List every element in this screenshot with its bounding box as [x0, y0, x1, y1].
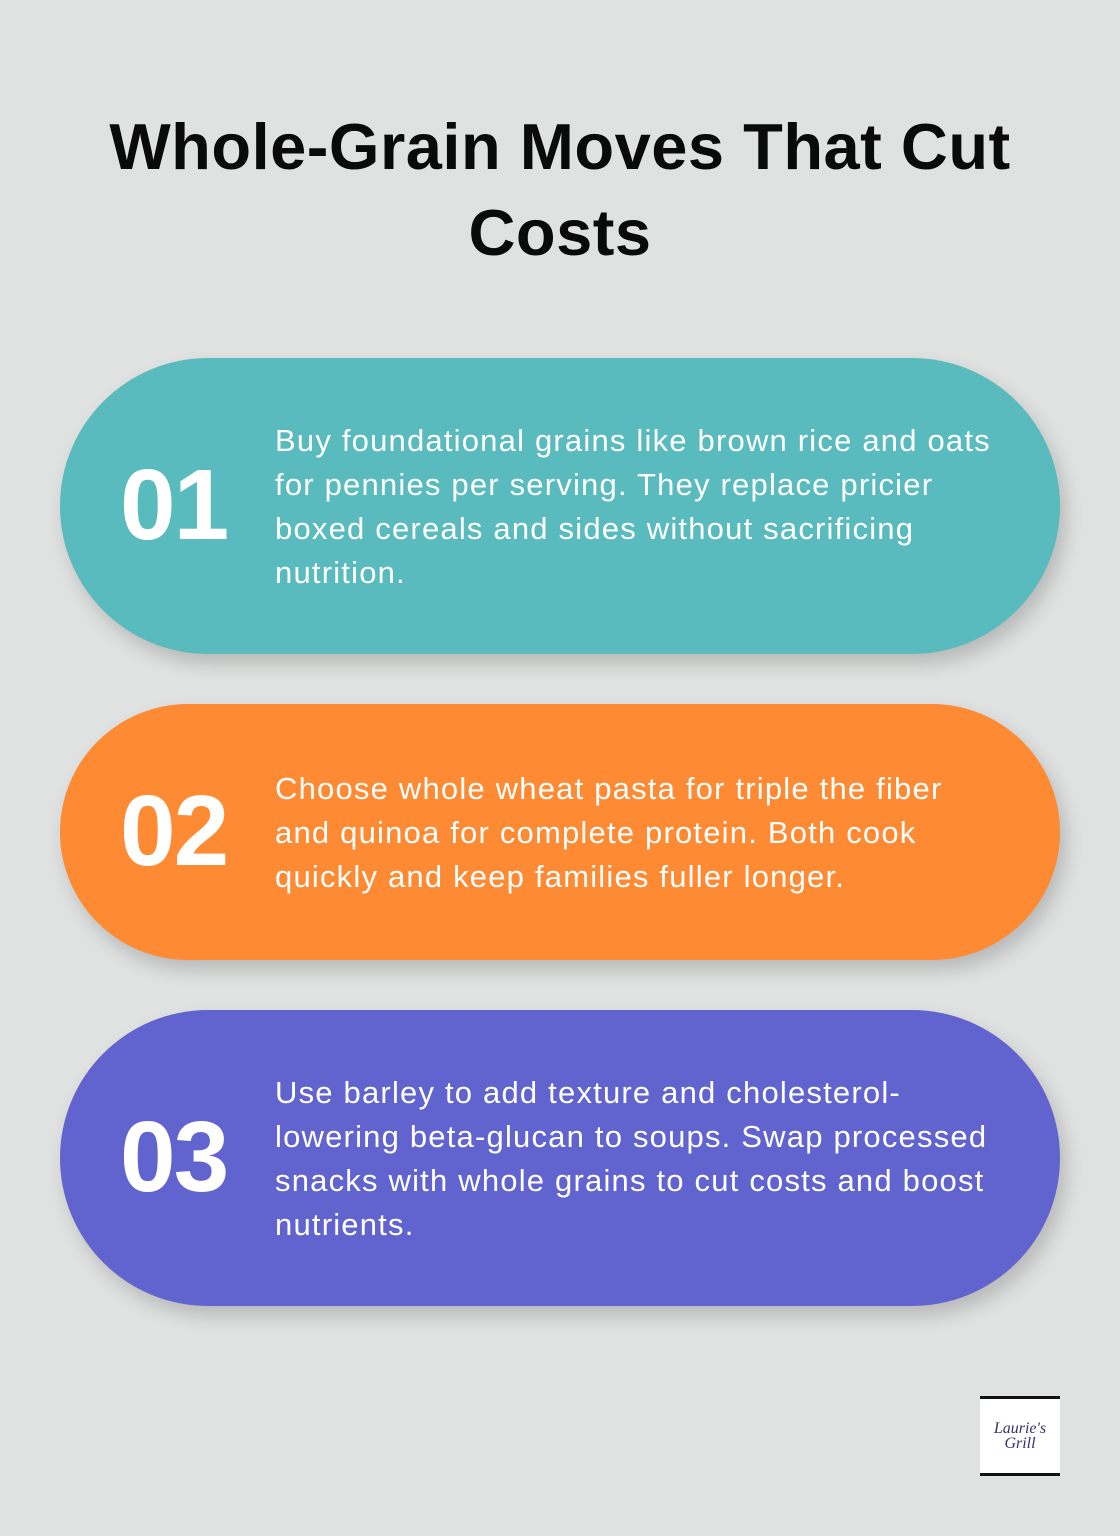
text step 1: nutrition.	[275, 555, 406, 590]
text step 3	[275, 1075, 987, 1242]
panel: step 3	[60, 1010, 1060, 1306]
text step 3: lowering beta-glucan to soups. Swap processed	[275, 1119, 987, 1154]
panel: step 2	[60, 704, 1060, 960]
text step 2: and quinoa for complete protein. Both cook	[275, 815, 917, 850]
title	[109, 110, 1011, 269]
text step 2	[275, 771, 942, 894]
title: Costs	[468, 196, 652, 269]
title: Whole-Grain Moves That Cut	[109, 110, 1011, 183]
text step 1	[275, 423, 991, 590]
panel: step 1	[60, 358, 1060, 654]
text step 1: for pennies per serving. They replace pricier	[275, 467, 933, 502]
text step 3: nutrients.	[275, 1207, 415, 1242]
text step 1: Buy foundational grains like brown rice and oats	[275, 423, 991, 458]
number 02: 02	[120, 775, 227, 887]
text step 1: boxed cereals and sides without sacrificing	[275, 511, 914, 546]
text step 2: quickly and keep families fuller longer.	[275, 859, 845, 894]
logo: Grill	[1004, 1435, 1036, 1452]
logo: Laurie's	[994, 1420, 1046, 1437]
text step 2: Choose whole wheat pasta for triple the fiber	[275, 771, 942, 806]
text step 3: Use barley to add texture and cholesterol-	[275, 1075, 901, 1110]
logo	[980, 1396, 1060, 1476]
text step 3: snacks with whole grains to cut costs and boost	[275, 1163, 984, 1198]
number 03: 03	[120, 1101, 227, 1213]
number 01: 01	[120, 449, 227, 561]
